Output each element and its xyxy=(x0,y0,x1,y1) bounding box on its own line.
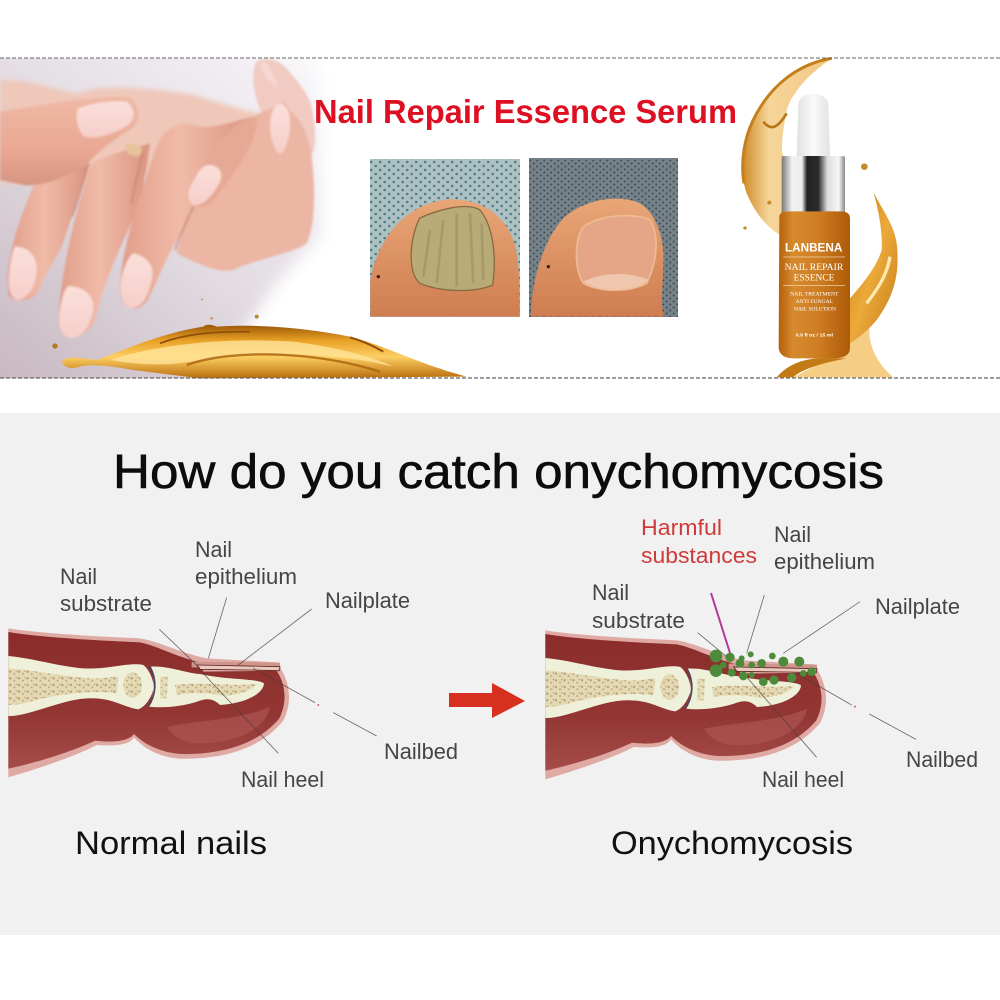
label: Harmful substances: substances xyxy=(641,543,757,568)
bottle label: ANTI FUNGAL xyxy=(796,299,833,305)
dropper bulb xyxy=(797,94,830,157)
droplets xyxy=(743,163,868,230)
leader lines xyxy=(698,595,916,757)
diagram: onychomycosis cross-section xyxy=(545,515,978,792)
bottle label: ESSENCE xyxy=(794,273,835,283)
label: Nailplate: Nailplate xyxy=(875,594,960,619)
caption: Onychomycosis: Onychomycosis xyxy=(611,825,853,861)
label: Nail epithelium: Nail xyxy=(195,537,232,562)
title: Nail Repair Essence Serum: Nail Repair Essence Serum xyxy=(314,93,737,130)
bottle label: NAIL REPAIR xyxy=(785,263,844,273)
bottle label: 0.5 fl oz / 15 ml xyxy=(796,332,833,337)
panel: gray explanation section xyxy=(0,413,1000,935)
banner: hero image strip xyxy=(0,40,467,397)
swirl: left golden ribbon xyxy=(743,58,832,237)
bottle body xyxy=(779,211,850,358)
diagram: normal nail cross-section xyxy=(8,537,458,792)
label: Nail epithelium: epithelium xyxy=(774,549,875,574)
label: Nail substrate: substrate xyxy=(592,608,685,633)
label: Nail epithelium: epithelium xyxy=(195,564,297,589)
finger anatomy xyxy=(8,628,289,777)
dashed rule top xyxy=(0,57,1000,59)
bottle label: NAIL SOLUTION xyxy=(794,306,836,312)
image: infected toenail before xyxy=(370,159,520,317)
fungus clusters xyxy=(710,650,816,686)
label: Nail epithelium: Nail xyxy=(774,522,811,547)
label: Nail substrate: substrate xyxy=(60,591,152,616)
label: Nailbed: Nailbed xyxy=(906,747,978,772)
label: Nail substrate: Nail xyxy=(592,580,629,605)
label: Nail heel: Nail heel xyxy=(762,767,844,792)
dashed rule bottom xyxy=(0,377,1000,379)
bottle label: LANBENA xyxy=(785,240,843,254)
leader lines xyxy=(159,598,377,753)
label: Harmful substances: Harmful xyxy=(641,515,722,540)
label: Nailplate: Nailplate xyxy=(325,588,410,613)
image: golden oil splash xyxy=(52,298,467,378)
label: Nail substrate: Nail xyxy=(60,564,97,589)
purple pointer xyxy=(711,593,730,653)
silver collar xyxy=(782,156,845,214)
caption: Normal nails: Normal nails xyxy=(75,825,267,861)
image: healthy toenail after xyxy=(529,158,678,317)
swirl: right golden ribbon xyxy=(777,192,898,377)
arrow: normal to infected xyxy=(449,683,525,718)
heading: How do you catch onychomycosis: How do you catch onychomycosis xyxy=(113,446,884,499)
finger anatomy xyxy=(545,630,826,779)
image: hands with manicured nails xyxy=(0,40,400,397)
bottle label xyxy=(783,240,845,337)
image: LANBENA serum bottle with golden swirl xyxy=(743,58,898,377)
bottle label: NAIL TREATMENT xyxy=(790,292,839,298)
label: Nailbed: Nailbed xyxy=(384,739,458,764)
label: Nail heel: Nail heel xyxy=(241,767,324,792)
